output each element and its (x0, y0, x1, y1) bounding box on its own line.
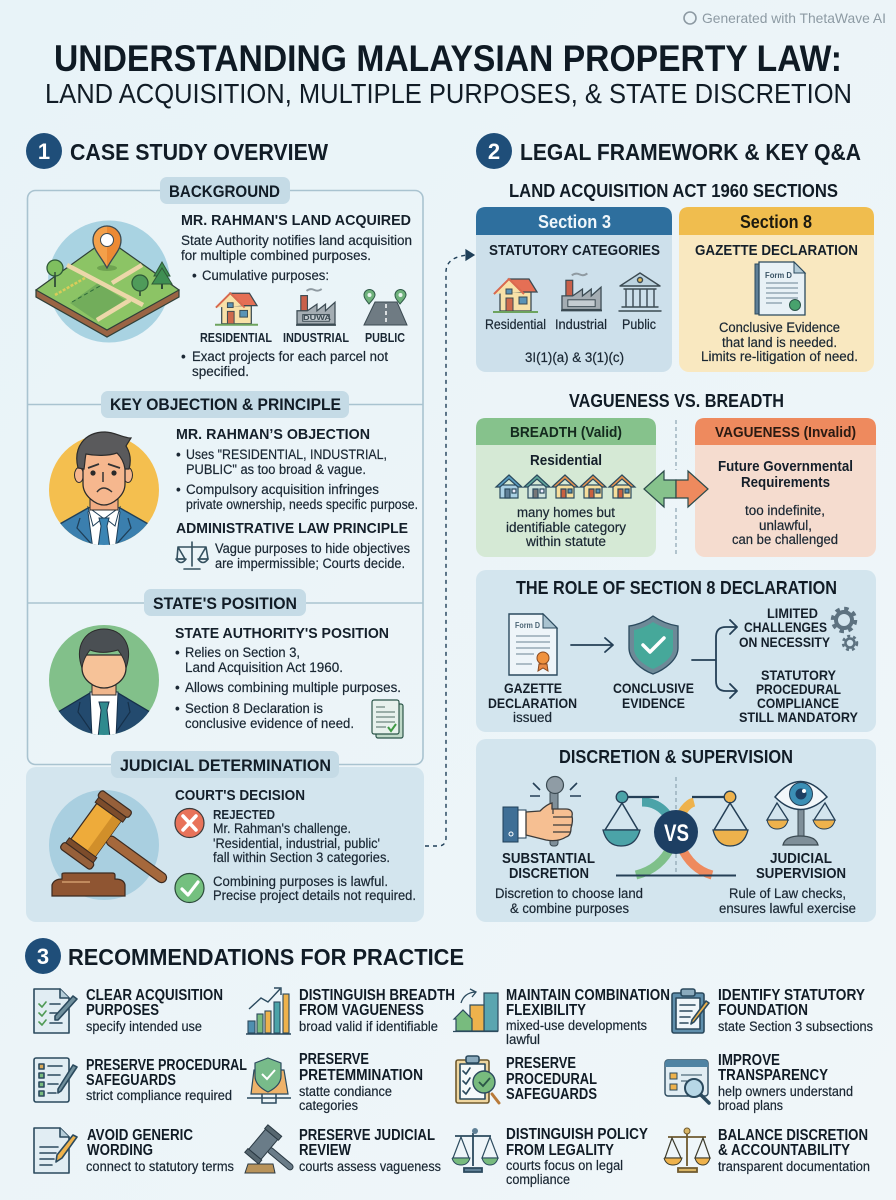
section: key objection and principle: KEY OBJECTION & PRINCIPLE (110, 395, 341, 414)
text: vagueness explanation: can be challenged (732, 532, 838, 547)
text: conclusive evidence (701, 320, 858, 364)
text: breadth explanation (506, 505, 626, 549)
recommendation: preserve procedural safeguards 2 (456, 1055, 597, 1103)
recommendation: balance discretion and accountability (664, 1127, 870, 1174)
heading: section 3 recommendations (25, 938, 464, 974)
section: state's position (49, 589, 403, 740)
text: land acquired: • (181, 349, 186, 364)
icon: gazette document with seal (509, 614, 557, 675)
text: state authority position: STATE AUTHORITY'S POSITION (175, 625, 389, 642)
recommendation: preserve procedural safeguards 1: PRESERVE PROCEDURAL (86, 1057, 247, 1074)
text: conclusive evidence: that land is needed. (722, 335, 837, 350)
text: land acquired: State Authority notifies land acquisition (181, 233, 412, 248)
subsection references: 3I(1)(a) & 3(1)(c) (525, 350, 624, 365)
icon: residential (200, 293, 272, 345)
section: state's position: STATE'S POSITION (153, 594, 297, 613)
recommendation: distinguish breadth from vagueness: DISTINGUISH BREADTH (299, 987, 455, 1004)
recommendation: preserve pretemmination (247, 1051, 423, 1113)
text: land acquired (181, 212, 412, 379)
text: land acquired: specified. (192, 364, 249, 379)
icon: factory (561, 273, 602, 311)
icon: gears (832, 608, 857, 650)
text: court's decision: Mr. Rahman's challenge. (213, 821, 351, 836)
title: LAND ACQUISITION, MULTIPLE PURPOSES, & STATE DISCRETION (45, 78, 852, 109)
recommendation: improve transparency: broad plans (718, 1098, 783, 1113)
label: substantial discretion: & combine purposes (510, 901, 629, 916)
recommendation: preserve procedural safeguards 2: PRESERVE (506, 1055, 576, 1072)
text: state authority position: • (175, 680, 180, 695)
text: court's decision: fall within Section 3 categories. (213, 850, 390, 865)
text: statutory compliance: STILL MANDATORY (739, 709, 859, 725)
recommendation: improve transparency (665, 1052, 853, 1113)
icon: Form D document: Form D (765, 271, 792, 280)
recommendation: avoid generic wording: AVOID GENERIC (87, 1127, 193, 1144)
label: judicial supervision: Rule of Law checks, (729, 886, 846, 901)
text: breadth explanation: many homes but (517, 505, 615, 520)
icon: Form D document (755, 262, 805, 315)
icon: hand holding gavel (503, 776, 581, 846)
text: statutory compliance (739, 667, 859, 725)
heading: section 3 recommendations: 3 (37, 944, 49, 969)
text: objection: • (176, 482, 181, 497)
text: land acquired: Cumulative purposes: (202, 268, 329, 283)
recommendation: avoid generic wording: WORDING (87, 1142, 153, 1159)
section: background (36, 177, 412, 379)
recommendation: identify statutory foundation (672, 987, 873, 1034)
recommendation: maintain combination flexibility: MAINTAIN COMBINATION (506, 987, 670, 1004)
text: limited challenges (739, 605, 831, 650)
panel: role of section 8 declaration: THE ROLE OF SECTION 8 DECLARATION (516, 578, 837, 598)
panel: section 3: Section 3 (538, 212, 611, 232)
label: conclusive evidence: CONCLUSIVE (613, 680, 694, 696)
recommendation: preserve procedural safeguards 1: SAFEGUARDS (86, 1072, 176, 1089)
recommendation: preserve judicial review: courts assess vagueness (299, 1159, 441, 1174)
recommendation: avoid generic wording (34, 1127, 234, 1174)
recommendation: clear acquisition purposes: specify intended use (86, 1019, 202, 1034)
text: state authority position: conclusive evidence of need. (185, 716, 354, 731)
panel: vagueness invalid: VAGUENESS (Invalid) (715, 424, 856, 441)
icon: shield with check (629, 616, 678, 674)
recommendation: balance discretion and accountability: BALANCE DISCRETION (718, 1127, 868, 1144)
recommendation: identify statutory foundation: state Section 3 subsections (718, 1019, 873, 1034)
arrow: branching outcomes (692, 620, 737, 698)
panel: discretion and supervision: DISCRETION & SUPERVISION (559, 747, 793, 767)
recommendation: distinguish breadth from vagueness: FROM VAGUENESS (299, 1002, 424, 1019)
recommendation: preserve pretemmination: PRETEMMINATION (299, 1067, 423, 1084)
icon: versus balance scales (603, 777, 748, 876)
label: gazette declaration: GAZETTE (504, 680, 562, 696)
text: court's decision: Precise project details not required. (213, 888, 416, 903)
text: limited challenges: LIMITED (767, 605, 818, 621)
text: state authority position: Relies on Section 3, (185, 645, 300, 660)
icon: public building (619, 273, 661, 311)
text: objection: MR. RAHMAN’S OBJECTION (176, 426, 370, 443)
icon: rejected cross (175, 808, 204, 838)
recommendation: identify statutory foundation: FOUNDATION (718, 1002, 808, 1019)
icon: versus balance scales: VS (664, 820, 689, 847)
icon: worried landowner avatar (49, 431, 159, 545)
text: limited challenges: ON NECESSITY (739, 634, 831, 650)
label: gazette declaration: DECLARATION (488, 695, 577, 711)
text: court's decision: REJECTED (213, 807, 275, 822)
text: land acquired: MR. RAHMAN'S LAND ACQUIRED (181, 212, 411, 229)
panel: section 3: STATUTORY CATEGORIES (489, 242, 660, 259)
icon: residential: RESIDENTIAL (200, 330, 272, 345)
recommendation: maintain combination flexibility: lawful (506, 1032, 540, 1047)
label: gazette declaration: issued (513, 709, 552, 725)
panel: case study outline (28, 177, 423, 764)
icon: eye over scales (767, 782, 835, 845)
panel: section 8 (679, 207, 874, 372)
label: substantial discretion: Discretion to choose land (495, 886, 643, 901)
recommendation: distinguish breadth from vagueness: broad valid if identifiable (299, 1019, 438, 1034)
text: court's decision: 'Residential, industrial, public' (213, 836, 380, 851)
text: statutory compliance: STATUTORY (761, 667, 837, 683)
recommendation: preserve judicial review: REVIEW (299, 1142, 351, 1159)
text: breadth explanation: within statute (525, 534, 606, 549)
recommendation: improve transparency: help owners understand (718, 1084, 853, 1099)
text: vagueness explanation: unlawful, (759, 518, 812, 533)
title (45, 38, 852, 109)
text: limited challenges: CHALLENGES (744, 619, 827, 635)
icon: approved document (372, 700, 403, 738)
text: court's decision (175, 787, 416, 903)
section: key objection and principle (49, 391, 418, 571)
text: statutory compliance: PROCEDURAL (756, 681, 841, 697)
recommendation: balance discretion and accountability: & ACCOUNTABILITY (718, 1142, 851, 1159)
heading: section 1 case study overview: 1 (38, 139, 50, 164)
heading: section 1 case study overview: CASE STUDY OVERVIEW (70, 139, 329, 165)
recommendation: clear acquisition purposes: PURPOSES (86, 1002, 159, 1019)
section: background: BACKGROUND (169, 182, 280, 201)
title: UNDERSTANDING MALAYSIAN PROPERTY LAW: (54, 38, 842, 79)
text: state authority position: • (175, 645, 180, 660)
heading: section 3 recommendations: RECOMMENDATIONS FOR PRACTICE (68, 944, 464, 970)
recommendation: preserve judicial review (245, 1125, 441, 1183)
text: state authority position: Land Acquisition Act 1960. (185, 660, 343, 675)
text: administrative law principle: ADMINISTRATIVE LAW PRINCIPLE (176, 520, 408, 537)
recommendation: clear acquisition purposes (34, 987, 223, 1034)
text: statutory compliance: COMPLIANCE (757, 695, 839, 711)
text: land acquired: Exact projects for each parcel not (192, 349, 388, 364)
heading: section 2 legal framework: LEGAL FRAMEWORK & KEY Q&A (520, 139, 861, 165)
text: state authority position: • (175, 701, 180, 716)
recommendation: clear acquisition purposes: CLEAR ACQUISITION (86, 987, 223, 1004)
icon: row of five homes (496, 475, 635, 498)
recommendation: balance discretion and accountability: transparent documentation (718, 1159, 870, 1174)
recommendation: maintain combination flexibility: FLEXIBILITY (506, 1002, 587, 1019)
text: state authority position: Allows combining multiple purposes. (185, 680, 401, 695)
label: substantial discretion: DISCRETION (509, 865, 589, 882)
watermark: generated with ThetaWave: Generated with ThetaWave AI (702, 10, 886, 26)
panel: section 8: Section 8 (740, 212, 812, 232)
recommendation: maintain combination flexibility (453, 987, 670, 1047)
recommendation: preserve procedural safeguards 1 (34, 1057, 247, 1103)
text: court's decision: Combining purposes is lawful. (213, 874, 388, 889)
panel: vagueness invalid: Requirements (741, 474, 830, 491)
panel: discretion and supervision (476, 739, 876, 922)
recommendation: preserve judicial review: PRESERVE JUDICIAL (299, 1127, 435, 1144)
text: administrative law principle: are impermissible; Courts decide. (215, 556, 405, 571)
text: objection: private ownership, needs specific purpose. (186, 497, 418, 512)
category labels: Public (622, 317, 656, 332)
arrow: gazette to evidence (571, 638, 613, 652)
icon: gavel (49, 790, 187, 910)
arrow: two-way breadth vs vagueness (644, 471, 708, 507)
recommendation: preserve procedural safeguards 1: strict compliance required (86, 1088, 232, 1103)
recommendation: distinguish policy from legality: compliance (506, 1172, 570, 1187)
recommendation: preserve procedural safeguards 2: PROCEDURAL (506, 1071, 597, 1088)
panel: judicial determination (26, 751, 424, 922)
recommendation: distinguish policy from legality (452, 1126, 649, 1187)
icon: approved check (175, 874, 204, 902)
icon: industrial (283, 289, 349, 345)
text: land acquired: • (192, 268, 197, 283)
label: conclusive evidence: EVIDENCE (622, 695, 685, 711)
panel: vagueness invalid (695, 418, 876, 557)
text: land acquired: for multiple combined purposes. (181, 248, 371, 263)
panel: judicial determination: JUDICIAL DETERMINATION (120, 756, 331, 775)
icon: public road (364, 290, 407, 345)
heading: section 2 legal framework (476, 133, 861, 169)
text: state authority position (175, 625, 401, 731)
label: judicial supervision: SUPERVISION (756, 865, 846, 882)
text: objection: • (176, 447, 181, 462)
panel: vagueness invalid: Future Governmental (718, 458, 853, 475)
recommendation: distinguish breadth from vagueness (246, 987, 455, 1034)
panel: section 8: GAZETTE DECLARATION (695, 242, 858, 259)
recommendation: preserve pretemmination: categories (299, 1098, 358, 1113)
panel: section 3 (476, 207, 672, 372)
recommendation: improve transparency: TRANSPARENCY (718, 1067, 829, 1084)
icon: industrial: DUWA (303, 315, 331, 322)
text: breadth explanation: identifiable category (506, 520, 626, 535)
heading: land acquisition act sections: LAND ACQUISITION ACT 1960 SECTIONS (509, 181, 838, 201)
panel: breadth valid (476, 418, 656, 557)
icon: land parcel map (36, 220, 179, 342)
text: state authority position: Section 8 Declaration is (185, 701, 323, 716)
icon: gazette document with seal: Form D (515, 621, 540, 630)
recommendation: preserve pretemmination: PRESERVE (299, 1051, 369, 1068)
label: substantial discretion: SUBSTANTIAL (502, 850, 595, 867)
recommendation: identify statutory foundation: IDENTIFY STATUTORY (718, 987, 866, 1004)
text: administrative law principle: Vague purposes to hide objectives (215, 541, 410, 556)
text: objection: PUBLIC" as too broad & vague. (186, 462, 366, 477)
icon: small scales (176, 542, 208, 569)
category labels: Residential (485, 317, 546, 332)
recommendation: distinguish policy from legality: DISTINGUISH POLICY (506, 1126, 649, 1143)
text: conclusive evidence: Conclusive Evidence (719, 320, 840, 335)
arrow: dashed connector from judicial determination to legal framework (425, 250, 474, 846)
label: judicial supervision: JUDICIAL (770, 850, 832, 867)
recommendation: preserve pretemmination: statte condiance (299, 1084, 392, 1099)
recommendation: improve transparency: IMPROVE (718, 1052, 780, 1069)
text: objection (176, 426, 418, 512)
label: judicial supervision: ensures lawful exercise (719, 901, 856, 916)
icon: residential house (493, 279, 538, 312)
icon: industrial: INDUSTRIAL (283, 330, 349, 345)
text: objection: Compulsory acquisition infringes (186, 482, 379, 497)
label: conclusive evidence (613, 680, 694, 711)
heading: vagueness vs breadth: VAGUENESS VS. BREADTH (569, 391, 784, 411)
label: substantial discretion (495, 850, 643, 916)
icon: public road: PUBLIC (365, 330, 406, 345)
panel: breadth valid: Residential (530, 452, 602, 469)
recommendation: preserve procedural safeguards 2: SAFEGUARDS (506, 1086, 597, 1103)
text: court's decision: COURT'S DECISION (175, 787, 305, 804)
text: vagueness explanation: too indefinite, (745, 503, 825, 518)
recommendation: distinguish policy from legality: FROM LEGALITY (506, 1142, 615, 1159)
heading: section 2 legal framework: 2 (488, 139, 500, 164)
text: conclusive evidence: Limits re-litigation of need. (701, 349, 858, 364)
recommendation: maintain combination flexibility: mixed-use developments (506, 1018, 647, 1033)
category labels (485, 317, 656, 332)
text: objection: Uses "RESIDENTIAL, INDUSTRIAL, (186, 447, 387, 462)
label: judicial supervision (719, 850, 856, 916)
recommendation: distinguish policy from legality: courts focus on legal (506, 1158, 623, 1173)
panel: role of section 8 declaration (476, 570, 876, 732)
category labels: Industrial (555, 317, 607, 332)
recommendation: avoid generic wording: connect to statutory terms (86, 1159, 234, 1174)
heading: section 1 case study overview (26, 133, 329, 169)
text: administrative law principle (176, 520, 410, 571)
text: vagueness explanation (732, 503, 838, 547)
label: gazette declaration (488, 680, 577, 725)
icon: state official avatar (49, 625, 159, 740)
panel: breadth valid: BREADTH (Valid) (510, 424, 622, 441)
